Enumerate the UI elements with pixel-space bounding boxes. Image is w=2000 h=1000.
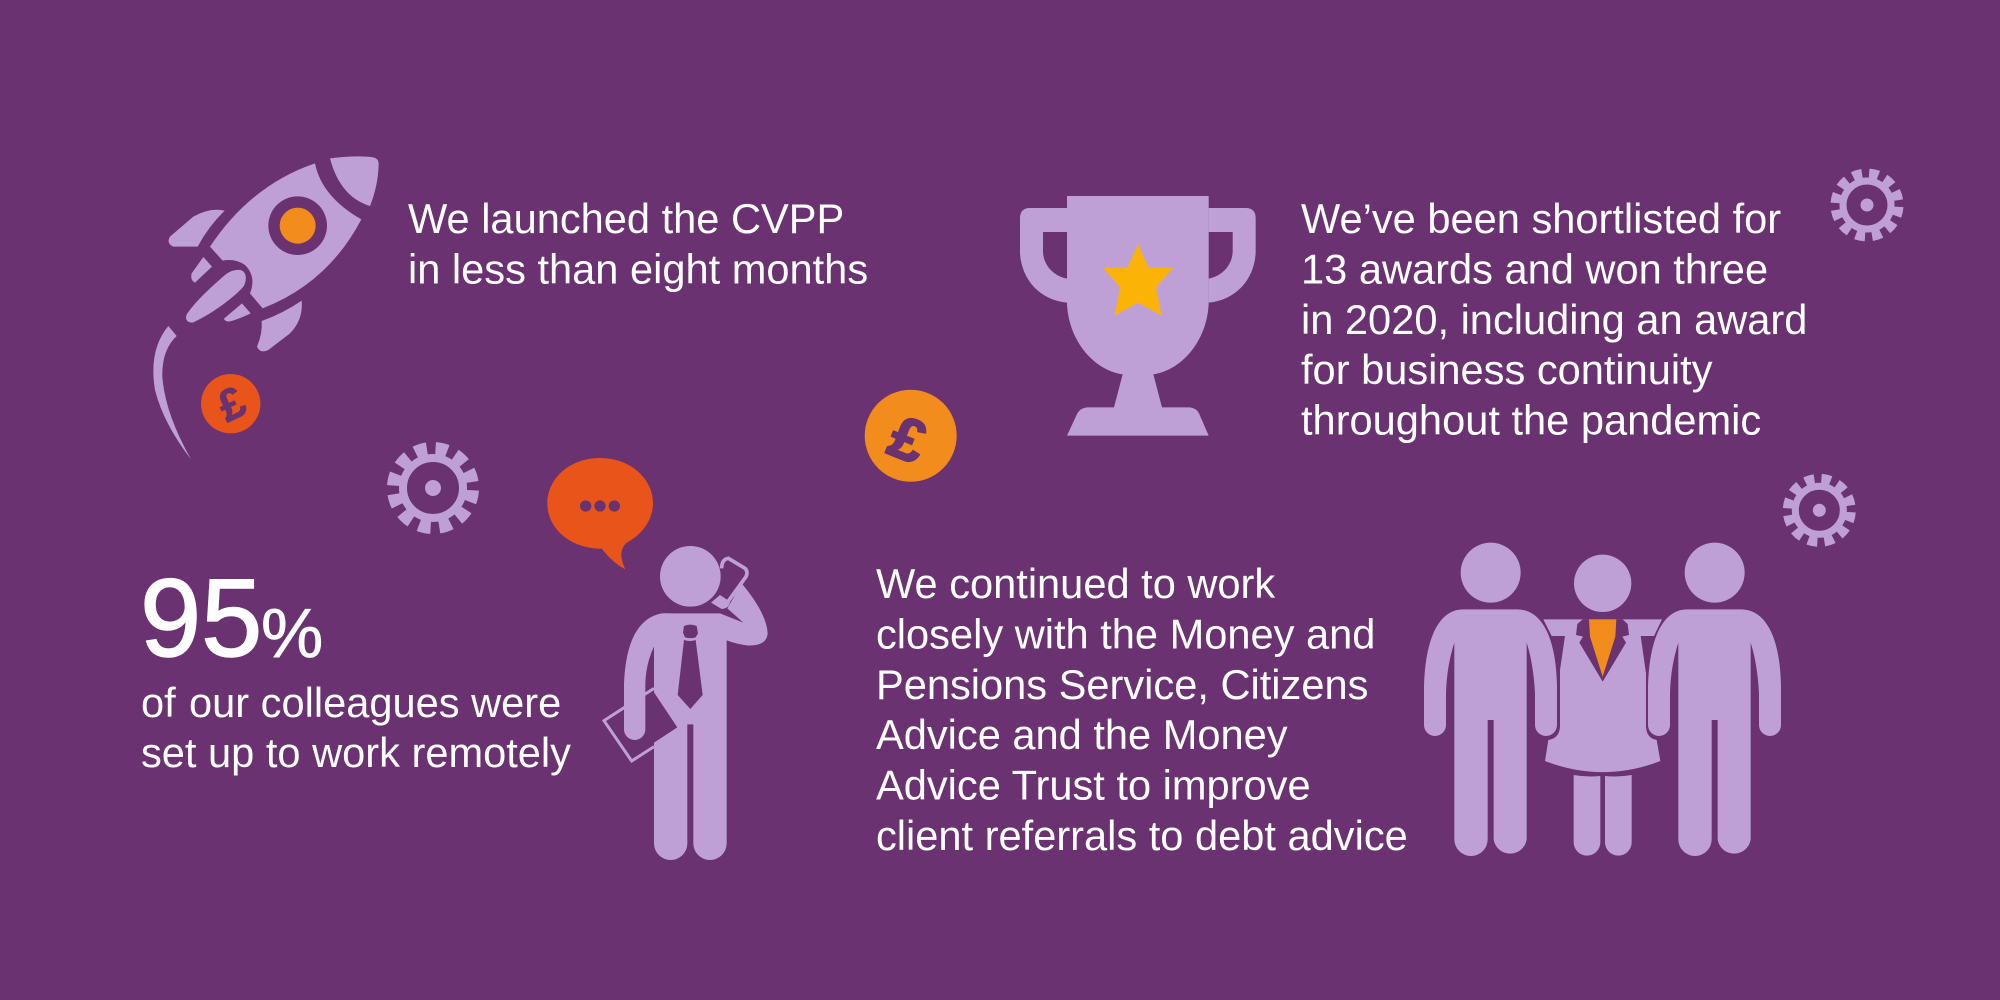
text: partnerships caption: client referrals to debt advice [876,812,1408,859]
icon: speech bubble [547,458,653,569]
icon: red pound coin: £ [210,377,254,432]
text: awards caption: in 2020, including an award [1301,296,1807,343]
icon: orange pound coin: £ [880,402,936,477]
icon: gear top right [1833,171,1901,239]
text: remote working caption: set up to work remotely [141,729,571,776]
statistic: 95 percent: 95 [140,557,262,680]
text: partnerships caption: Advice Trust to improve [876,762,1311,809]
text: awards caption: throughout the pandemic [1301,397,1761,444]
icon: gear left [391,446,475,530]
text: partnerships caption: Pensions Service, Citizens [876,661,1368,708]
text: awards caption: We’ve been shortlisted for [1301,195,1781,242]
text: rocket caption: We launched the CVPP [408,195,843,242]
text: awards caption: 13 awards and won three [1301,245,1768,292]
icon: man on phone with clipboard [604,546,768,860]
text: partnerships caption: We continued to work [876,560,1275,607]
text: remote working caption: our colleagues were [189,679,561,726]
text: rocket caption: in less than eight months [408,245,868,292]
text: partnerships caption: closely with the Money and [876,610,1375,657]
statistic: 95 percent: % [261,594,323,672]
icon: trophy [1020,196,1256,436]
text: awards caption: for business continuity [1301,346,1713,393]
text: remote working caption: of [141,679,176,726]
icon: orange pound coin [865,390,957,482]
icon: gear bottom right [1786,477,1853,544]
text: partnerships caption: Advice and the Money [876,711,1288,758]
icon: group of three people [1424,543,1781,856]
icon: rocket [153,156,379,459]
icon: red pound coin [201,374,260,433]
